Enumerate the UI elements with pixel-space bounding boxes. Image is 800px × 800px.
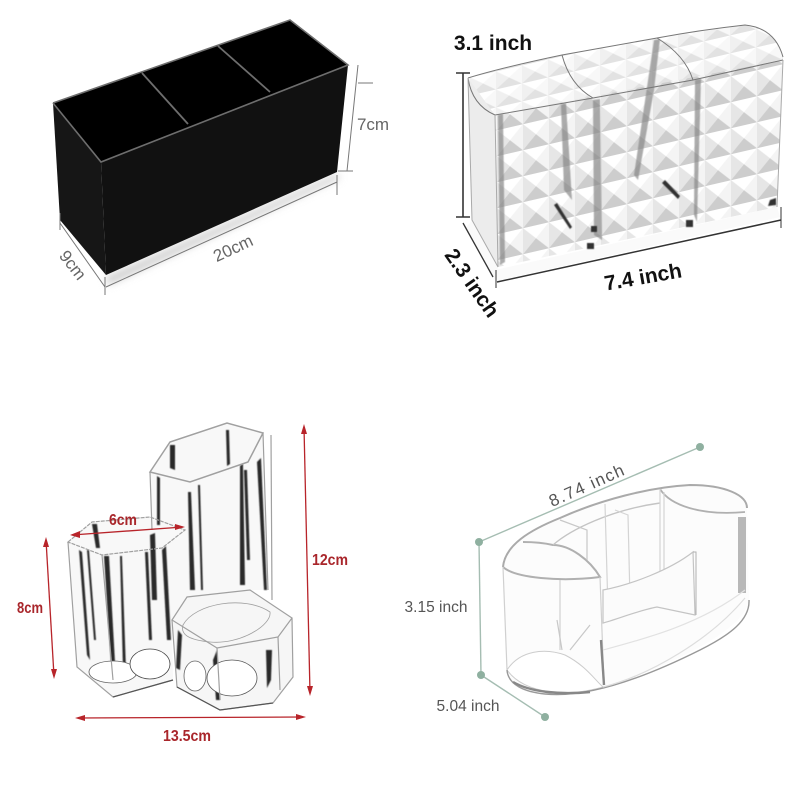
red dimension arrows: [43, 424, 313, 721]
panel: three-cylinder hexagonal holder, red metric dimensions: [17, 423, 348, 745]
label: 3.15 inch: 3.15 inch: [405, 599, 467, 616]
label: 8.74 inch: 8.74 inch: [546, 460, 628, 511]
label: 12cm: 12cm: [312, 552, 348, 569]
panel: black three-slot organizer, metric dimensions: [53, 20, 389, 295]
dimension lines: black box: [60, 65, 373, 295]
icon: oval clear organizer: [503, 485, 749, 695]
label: 13.5cm: 13.5cm: [163, 728, 211, 745]
icon: black box body: [53, 20, 348, 275]
panel: oval multi-compartment organizer, inch dimensions: [405, 443, 749, 721]
label: 7cm: 7cm: [357, 115, 389, 134]
label: 3.1 inch: 3.1 inch: [454, 32, 532, 55]
label: 20cm: 20cm: [210, 231, 256, 266]
label: 6cm: 6cm: [109, 512, 137, 529]
dimension lines and dots: [475, 443, 704, 721]
label: 9cm: 9cm: [55, 247, 90, 284]
label: 8cm: 8cm: [17, 600, 43, 617]
dimension lines: diamond organizer: [456, 73, 781, 288]
soft floor shadow: [106, 174, 340, 285]
label: 2.3 inch: 2.3 inch: [440, 245, 503, 322]
label: 7.4 inch: 7.4 inch: [603, 259, 684, 296]
icon: diamond acrylic organizer: [466, 25, 783, 281]
icon: hexagonal acrylic holder: [68, 423, 293, 710]
panel: diamond-cut clear three-slot organizer, inch dimensions: [440, 25, 783, 322]
label: 5.04 inch: 5.04 inch: [437, 698, 499, 715]
